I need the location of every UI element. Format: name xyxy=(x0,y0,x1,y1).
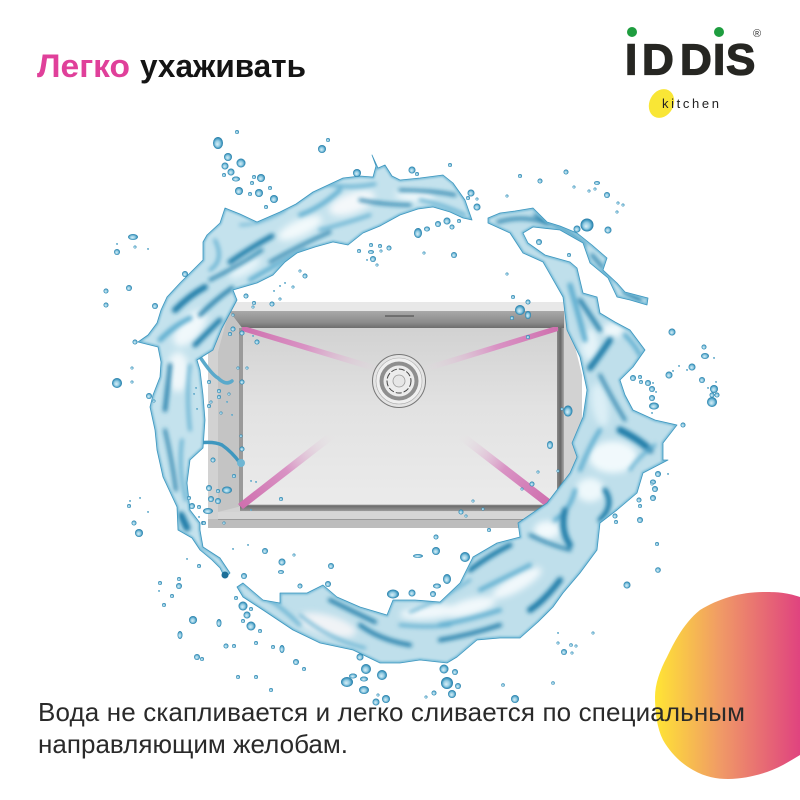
body text: Вода не скапливается и легко сливается по специальным xyxy=(38,697,745,727)
body text: направляющим желобам. xyxy=(38,729,348,759)
overflow slot xyxy=(385,315,414,317)
bowl floor xyxy=(243,329,557,505)
sink rim xyxy=(208,302,582,528)
right wall xyxy=(557,328,564,508)
title: ухаживать xyxy=(140,48,306,84)
logo: IDDIS kitchen: IDDIS xyxy=(625,36,755,84)
front trough xyxy=(240,504,564,511)
body text xyxy=(38,697,745,759)
water splash: right and bottom arc xyxy=(230,200,690,670)
back wall xyxy=(229,311,564,328)
logo: IDDIS kitchen: kitchen xyxy=(662,96,719,111)
title xyxy=(37,48,306,84)
sink xyxy=(208,302,582,528)
logo: IDDIS kitchen xyxy=(625,27,761,122)
water droplets xyxy=(104,130,720,706)
water splash: upper left arc xyxy=(138,154,472,578)
gradient blob xyxy=(655,592,800,779)
left wall xyxy=(218,311,242,512)
drain xyxy=(372,354,426,408)
drainage channels xyxy=(238,327,558,509)
logo: IDDIS kitchen: ® xyxy=(753,28,761,40)
title: Легко xyxy=(37,48,130,84)
